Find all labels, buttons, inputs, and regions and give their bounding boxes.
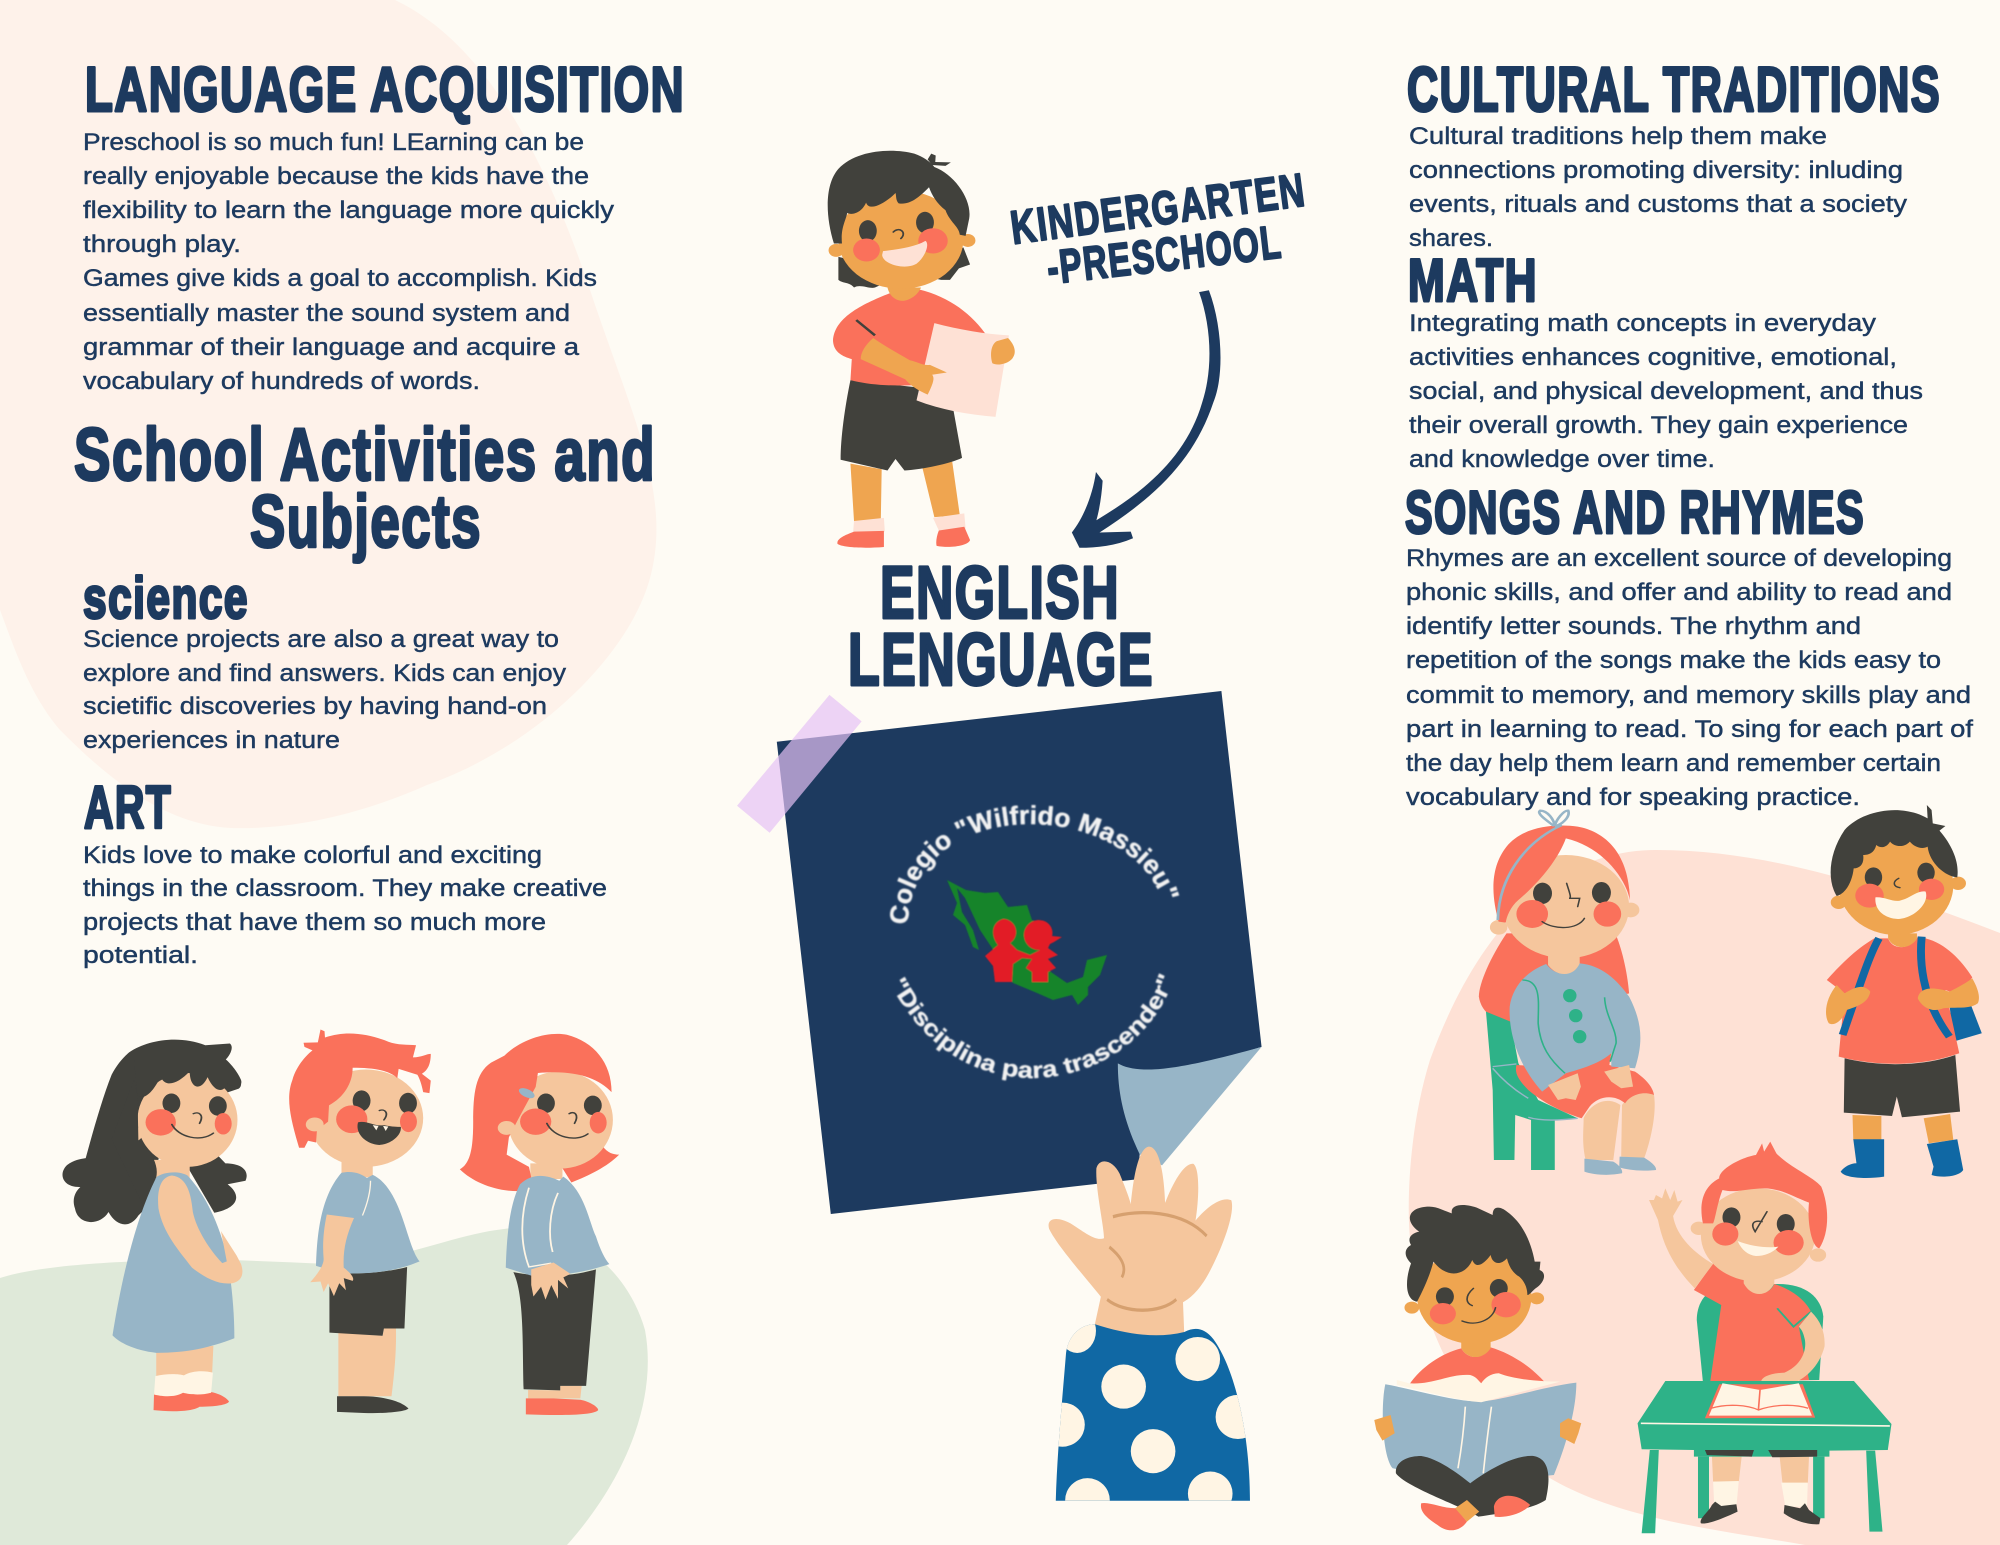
text block: language acquisition: really enjoyable because the kids have the [83, 163, 589, 190]
text block: language acquisition: through play. [83, 231, 241, 258]
text block: math: Integrating math concepts in everyday [1409, 310, 1876, 337]
text block: songs and rhymes: commit to memory, and memory skills play and [1406, 682, 1971, 709]
boy with red hair [289, 1030, 431, 1413]
logo text bottom: "Disciplina para trascender" [896, 972, 1168, 1082]
text block: songs and rhymes [1406, 545, 1973, 811]
text block: language acquisition: grammar of their language and acquire a [83, 334, 580, 361]
text block: cultural traditions: shares. [1409, 225, 1493, 252]
text block: songs and rhymes: Rhymes are an excellent source of developing [1406, 545, 1952, 572]
heading: school activities and subjects: Subjects [250, 480, 482, 563]
text block: art [83, 842, 607, 969]
text block: science [83, 626, 566, 754]
heading: english language: ENGLISH [880, 551, 1120, 634]
text block: science: explore and find answers. Kids can enjoy [83, 660, 566, 687]
panel: navy logo paper [776, 691, 1262, 1214]
illustration: boy at desk raising hand [1638, 1142, 1891, 1533]
heading: kindergarten preschool: KINDERGARTEN [1007, 163, 1309, 254]
illustration: boy holding paper [828, 151, 1015, 548]
arrow: curved arrow to title [1072, 290, 1221, 548]
heading: kindergarten preschool [1007, 163, 1309, 294]
heading: school activities and subjects [74, 413, 656, 563]
text block: language acquisition: vocabulary of hundreds of words. [83, 368, 480, 395]
text block: language acquisition: Games give kids a goal to accomplish. Kids [83, 265, 597, 292]
text block: science: experiences in nature [83, 727, 340, 754]
girl with red bob [460, 1034, 619, 1415]
text block: songs and rhymes: repetition of the songs make the kids easy to [1406, 647, 1941, 674]
text block: language acquisition: essentially master the sound system and [83, 300, 570, 327]
text block: math: and knowledge over time. [1409, 446, 1715, 473]
illustration: boy reading book [1374, 1205, 1581, 1530]
background blob: green bottom left [0, 1228, 648, 1545]
text block: art: things in the classroom. They make creative [83, 875, 607, 902]
heading: art: ART [84, 774, 172, 841]
text block: cultural traditions: Cultural traditions help them make [1409, 123, 1827, 150]
illustration: boy with backpack [1826, 805, 1982, 1178]
illustration: girl on chair [1479, 811, 1656, 1175]
heading: science: science [83, 566, 249, 631]
text block: songs and rhymes: the day help them learn and remember certain [1406, 750, 1941, 777]
text block: science: Science projects are also a great way to [83, 626, 559, 653]
text block: cultural traditions [1409, 123, 1907, 252]
logo text top: Colegio "Wilfrido Massieu" [889, 804, 1180, 924]
illustration: raised hand [1048, 1146, 1250, 1501]
logo map of Mexico with children [947, 880, 1107, 1005]
text block: art: projects that have them so much more [83, 909, 546, 936]
text block: cultural traditions: events, rituals and customs that a society [1409, 191, 1907, 218]
girl with black hair [62, 1040, 247, 1411]
text block: language acquisition: flexibility to learn the language more quickly [83, 197, 614, 224]
heading: school activities and subjects: School Activities and [74, 413, 656, 496]
paper sheet [777, 691, 1262, 1214]
text block: art: Kids love to make colorful and exciting [83, 842, 542, 869]
text block: science: scietific discoveries by having hand-on [83, 693, 547, 720]
text block: math: social, and physical development, and thus [1409, 378, 1923, 405]
text block: art: potential. [83, 942, 198, 969]
heading: math: MATH [1408, 247, 1538, 314]
text block: language acquisition [83, 129, 614, 395]
text block: math: their overall growth. They gain experience [1409, 412, 1908, 439]
heading: english language: LENGUAGE [848, 618, 1154, 701]
background blob: pink right [1409, 850, 2000, 1545]
tape [737, 695, 862, 833]
text block: language acquisition: Preschool is so much fun! LEarning can be [83, 129, 584, 156]
text block: songs and rhymes: vocabulary and for speaking practice. [1406, 784, 1860, 811]
heading: kindergarten preschool: -PRESCHOOL [1044, 215, 1285, 294]
text block: songs and rhymes: part in learning to read. To sing for each part of [1406, 716, 1973, 743]
text block: songs and rhymes: phonic skills, and offer and ability to read and [1406, 579, 1952, 606]
text block: math: activities enhances cognitive, emotional, [1409, 344, 1897, 371]
text block: songs and rhymes: identify letter sounds. The rhythm and [1406, 613, 1861, 640]
curled corner [1118, 1047, 1262, 1165]
text block: math [1409, 310, 1923, 473]
text block: cultural traditions: connections promoting diversity: inluding [1409, 157, 1903, 184]
heading: language acquisition: LANGUAGE ACQUISITION [85, 55, 685, 125]
illustration: three kids in line [62, 1030, 619, 1415]
background blob: peach top left [0, 0, 656, 828]
heading: english language [848, 551, 1154, 701]
